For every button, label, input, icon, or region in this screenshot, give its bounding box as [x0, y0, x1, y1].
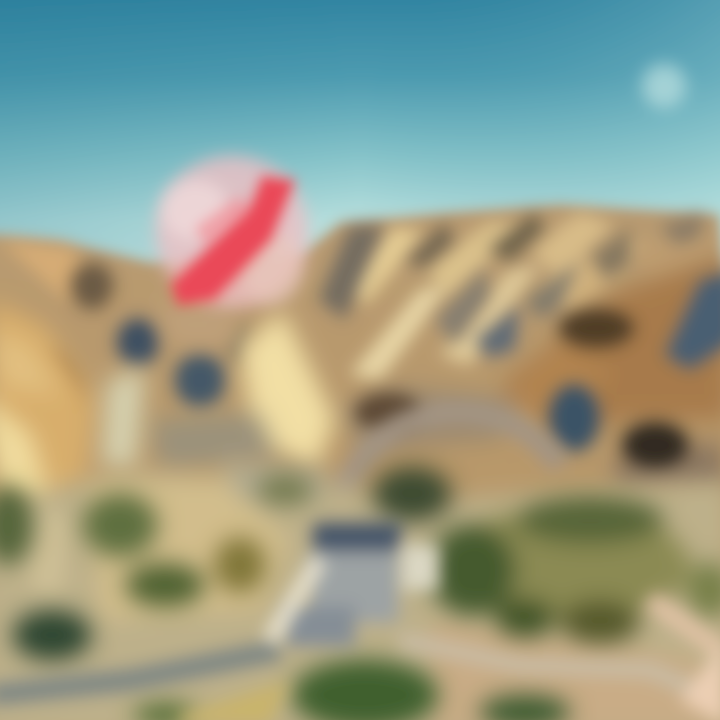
balloon symbol: pink circle with red stripe — [156, 156, 308, 308]
ground — [0, 460, 720, 720]
vegetation clusters — [0, 466, 720, 720]
sun glow — [642, 64, 686, 108]
rock arch — [340, 412, 560, 500]
left golden cliff — [0, 300, 335, 520]
winding road — [0, 560, 720, 720]
sky — [0, 0, 720, 300]
brown lower rock — [340, 255, 720, 490]
rock strata: light bands — [0, 212, 720, 380]
canyon rock mass — [0, 204, 720, 720]
rock shadows — [26, 212, 720, 469]
building — [285, 522, 438, 646]
